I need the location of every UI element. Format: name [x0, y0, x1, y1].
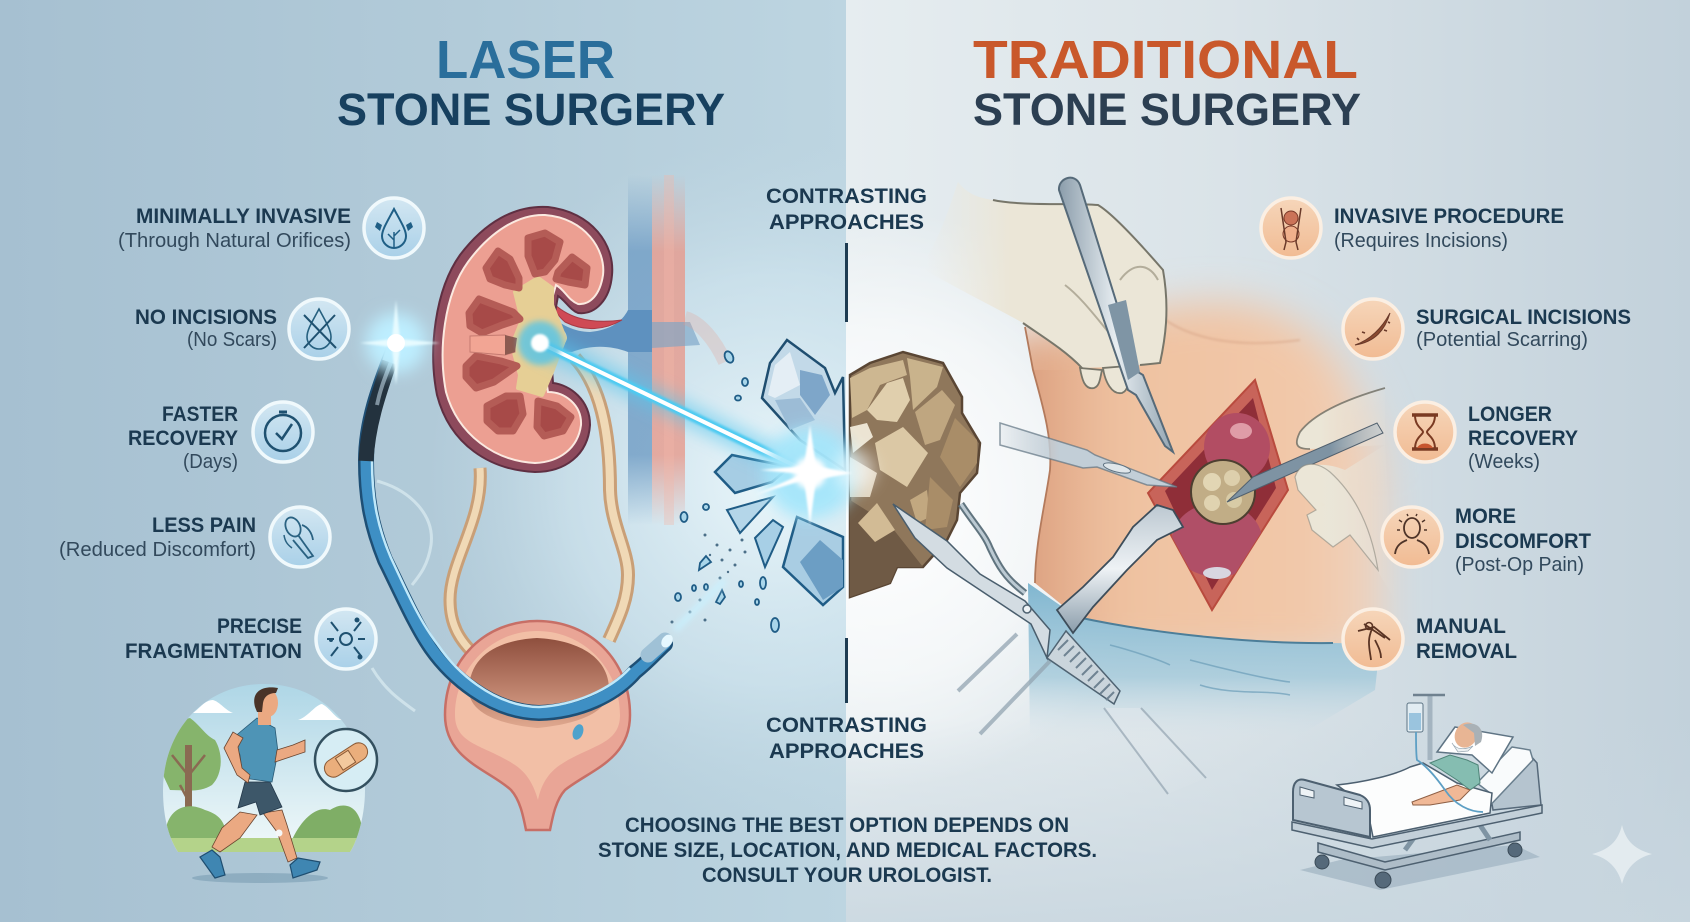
lower retractor	[1057, 505, 1183, 633]
heading: laser stone surgery: STONE SURGERY	[337, 84, 725, 135]
kidney lobes	[466, 233, 587, 436]
illustration: assisting gloved hand with tweezers	[1227, 388, 1395, 600]
drawback: invasive procedure: (Requires Incisions)	[1334, 230, 1508, 252]
callout: contrasting approaches bottom: APPROACHES	[769, 740, 924, 763]
divider line bottom	[845, 638, 848, 703]
benefit: less pain	[59, 507, 330, 567]
patient head	[1451, 719, 1482, 752]
benefit: faster recovery: FASTER	[162, 403, 238, 426]
illustration: man walking in park	[163, 684, 377, 883]
divider line top	[845, 243, 848, 322]
footboard	[1293, 780, 1370, 837]
benefit: precise fragmentation	[125, 609, 376, 669]
heading: laser stone surgery	[337, 30, 725, 135]
drawback: more discomfort: MORE	[1455, 505, 1516, 528]
drawback: manual removal: MANUAL	[1416, 615, 1506, 638]
drawback: more discomfort: DISCOMFORT	[1455, 530, 1591, 553]
benefit: minimally invasive: MINIMALLY INVASIVE	[136, 205, 351, 228]
laser beam	[518, 321, 875, 525]
benefit: precise fragmentation: FRAGMENTATION	[125, 640, 302, 663]
incision	[1148, 380, 1288, 610]
drawback: surgical incisions: SURGICAL INCISIONS	[1416, 306, 1631, 329]
drawback: invasive procedure	[1261, 198, 1564, 258]
vena cava and aorta	[548, 175, 725, 525]
icon: crossed-out drop	[289, 299, 349, 359]
gown	[1430, 755, 1480, 790]
drawback: longer recovery: (Weeks)	[1468, 451, 1540, 473]
icon: water drop with leaves	[364, 198, 424, 258]
benefit: faster recovery	[128, 402, 313, 473]
lower frame	[1318, 832, 1520, 870]
closing note: STONE SIZE, LOCATION, AND MEDICAL FACTORS.	[598, 839, 1097, 862]
drawback: longer recovery: RECOVERY	[1468, 427, 1578, 450]
IV pole and bag	[1407, 695, 1445, 760]
callout: contrasting approaches bottom	[766, 714, 927, 763]
runner	[192, 687, 328, 883]
backrest	[1477, 747, 1533, 813]
benefit: minimally invasive	[118, 198, 424, 258]
heading: traditional stone surgery: TRADITIONAL	[973, 30, 1358, 90]
illustration: retractor and forceps	[893, 423, 1206, 794]
scalpel	[1059, 178, 1173, 452]
benefit: no incisions: (No Scars)	[187, 329, 277, 351]
mattress and blanket	[1337, 763, 1492, 837]
arm	[1412, 785, 1470, 805]
drawback: surgical incisions: (Potential Scarring)	[1416, 329, 1588, 351]
panel: laser background	[0, 0, 846, 922]
illustration: skin with incision	[1000, 300, 1385, 740]
scalpel left blade	[1000, 423, 1177, 487]
icon: sparkle watermark	[1592, 825, 1652, 884]
forceps handles	[958, 634, 1050, 734]
heading: traditional stone surgery	[973, 30, 1361, 135]
drawback: invasive procedure: INVASIVE PROCEDURE	[1334, 205, 1564, 228]
IV tube	[1416, 732, 1483, 812]
heading: laser stone surgery: LASER	[436, 30, 615, 90]
closing note: CONSULT YOUR UROLOGIST.	[702, 864, 992, 887]
illustration: urinary tract anatomy	[433, 175, 725, 830]
illustration: ureteroscope	[366, 343, 675, 713]
benefit: less pain: LESS PAIN	[152, 514, 256, 537]
icon: fragments burst	[316, 609, 376, 669]
illustration: gloved hand with scalpel	[920, 178, 1173, 452]
bed support	[1488, 755, 1541, 810]
swoosh lines around scope	[372, 481, 431, 711]
benefit: less pain: (Reduced Discomfort)	[59, 539, 256, 561]
clouds	[193, 700, 233, 713]
drawback: manual removal: REMOVAL	[1416, 640, 1517, 663]
benefit: faster recovery: (Days)	[183, 451, 238, 473]
pillow	[1437, 727, 1513, 773]
icon: incision line	[1343, 299, 1403, 359]
callout: contrasting approaches top: APPROACHES	[769, 211, 924, 234]
benefit: no incisions: NO INCISIONS	[135, 306, 277, 329]
icon: organ and incision	[1261, 198, 1321, 258]
floor shadow	[1300, 845, 1540, 890]
illustration: patient in hospital bed	[1292, 695, 1542, 890]
wheels	[1315, 843, 1522, 888]
exposed stone	[1191, 460, 1255, 524]
benefit: precise fragmentation: PRECISE	[217, 615, 302, 638]
drawback: more discomfort	[1382, 505, 1591, 576]
ureters	[450, 358, 628, 652]
trees and bushes	[163, 718, 221, 791]
benefit: faster recovery: RECOVERY	[128, 427, 238, 450]
icon: bandage circle	[315, 729, 377, 791]
callout: contrasting approaches top: CONTRASTING	[766, 185, 927, 208]
icon: stopwatch	[253, 402, 313, 462]
icon: person in pain	[1382, 507, 1442, 567]
icon: hourglass	[1395, 402, 1455, 462]
drawback: longer recovery	[1395, 402, 1578, 473]
drawback: surgical incisions	[1343, 299, 1631, 359]
callout: contrasting approaches bottom: CONTRASTING	[766, 714, 927, 737]
glove fingers	[1080, 366, 1128, 393]
benefit: minimally invasive: (Through Natural Orifices)	[118, 230, 351, 252]
shard debris	[675, 350, 779, 632]
benefit: no incisions	[135, 299, 349, 359]
illustration: crystalline stone fragmenting	[670, 340, 845, 632]
glow: scope tip	[360, 300, 440, 385]
scope sleeve	[366, 352, 393, 461]
closing note: CHOOSING THE BEST OPTION DEPENDS ON	[625, 814, 1069, 837]
drawback: manual removal	[1343, 609, 1517, 669]
kidney	[433, 207, 612, 472]
icon: hand gesture	[270, 507, 330, 567]
illustration: traditional stone	[850, 352, 980, 597]
closing note	[598, 814, 1097, 887]
heading: traditional stone surgery: STONE SURGERY	[973, 84, 1361, 135]
drawback: longer recovery: LONGER	[1468, 403, 1552, 426]
drawback: more discomfort: (Post-Op Pain)	[1455, 554, 1584, 576]
callout: contrasting approaches top	[766, 185, 927, 234]
bladder	[445, 621, 630, 830]
forceps jaws	[893, 504, 1050, 658]
main frame	[1292, 805, 1542, 848]
panel: traditional background	[846, 0, 1690, 922]
icon: hand with forceps	[1343, 609, 1403, 669]
surgical drape	[1028, 583, 1380, 740]
